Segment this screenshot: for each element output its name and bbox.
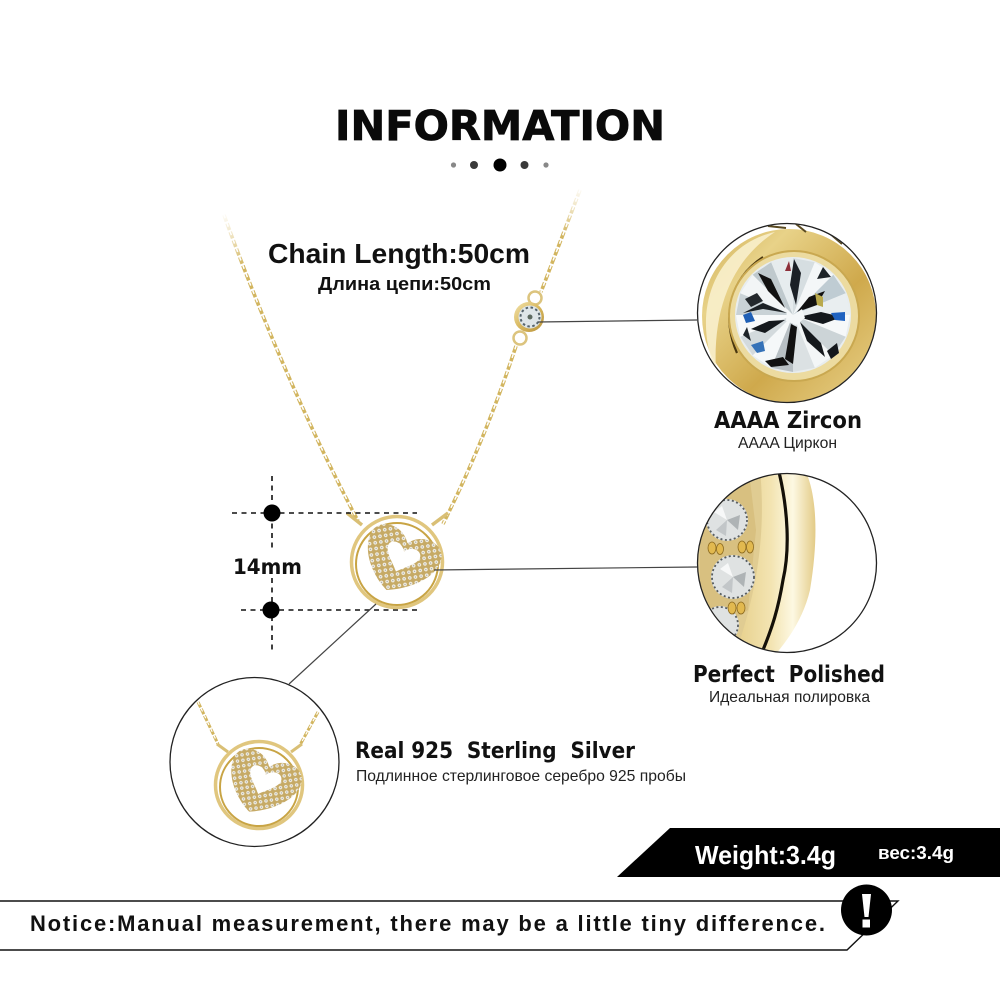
weight banner: Weight:3.4g [695,840,836,870]
dimension marks: 14mm: 14mm [233,555,302,579]
leader: polished [434,567,697,570]
polished heading: Perfect Polished [693,662,885,688]
detail circle: zircon [698,224,876,403]
title dots [451,158,549,172]
detail circle: silver pendant [170,678,339,846]
polished russian: Идеальная полировка [709,689,870,706]
title: INFORMATION [335,102,665,150]
weight banner: вес:3.4g [878,843,954,863]
leader: zircon [538,320,697,322]
chain length russian: Длина цепи:50cm [318,274,491,294]
notice box [0,901,898,950]
dimension marks: 14mm [232,476,417,652]
zircon heading: AAAA Zircon [714,408,862,434]
silver russian: Подлинное стерлинговое серебро 925 пробы [356,768,686,785]
chain bezel zircon [514,292,544,344]
main pendant [352,516,446,608]
icon: exclamation [841,884,892,936]
chain length label: Chain Length:50cm [268,238,530,269]
silver heading: Real 925 Sterling Silver [355,739,635,764]
zircon russian: AAAA Циркон [738,435,837,452]
notice box: Notice:Manual measurement, there may be a little tiny difference. [30,911,825,936]
necklace chain [224,190,580,525]
detail circle: polished [690,470,880,655]
leader: silver [289,604,376,684]
weight banner [617,828,1000,877]
